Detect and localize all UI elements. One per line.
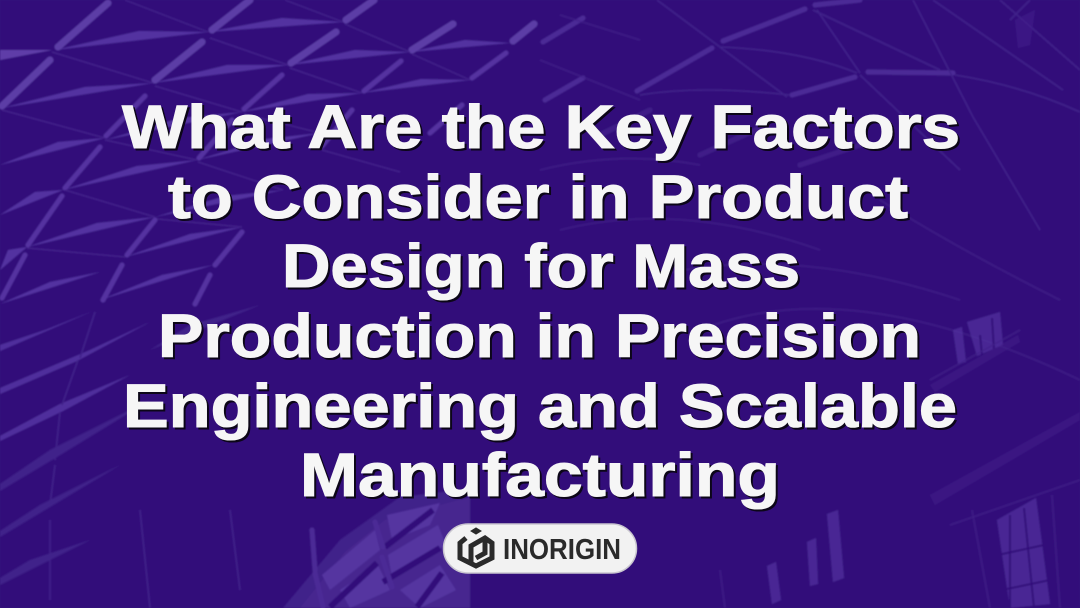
logo badge — [444, 524, 636, 573]
lower-left sweeping beams — [0, 305, 260, 608]
title shadow: Engineering and Scalable — [125, 374, 959, 442]
badge pill — [444, 524, 636, 573]
title shadow: to Consider in Product — [170, 165, 910, 233]
title shadow — [124, 95, 962, 511]
title — [122, 93, 962, 511]
icon: inorigin hexagon mark — [460, 528, 492, 566]
lower-right building windows — [720, 312, 1080, 608]
logo wordmark: INORIGIN — [503, 534, 621, 566]
title shadow: Manufacturing — [302, 443, 782, 511]
title text lines: Engineering and Scalable — [123, 372, 957, 440]
title text lines: Design for Mass — [282, 232, 800, 300]
title text lines: Manufacturing — [300, 441, 780, 509]
title shadow: What Are the Key Factors — [124, 95, 962, 163]
title text lines: Production in Precision — [158, 302, 921, 370]
title text lines: What Are the Key Factors — [122, 93, 960, 161]
title text lines: to Consider in Product — [168, 163, 908, 231]
upper-right fading lattice — [540, 0, 1080, 380]
title shadow: Design for Mass — [284, 234, 802, 302]
title text lines — [122, 93, 960, 509]
title shadow: Production in Precision — [160, 304, 923, 372]
upper-left lattice struts — [0, 0, 534, 304]
bottom-centre lattice cluster — [283, 490, 470, 608]
